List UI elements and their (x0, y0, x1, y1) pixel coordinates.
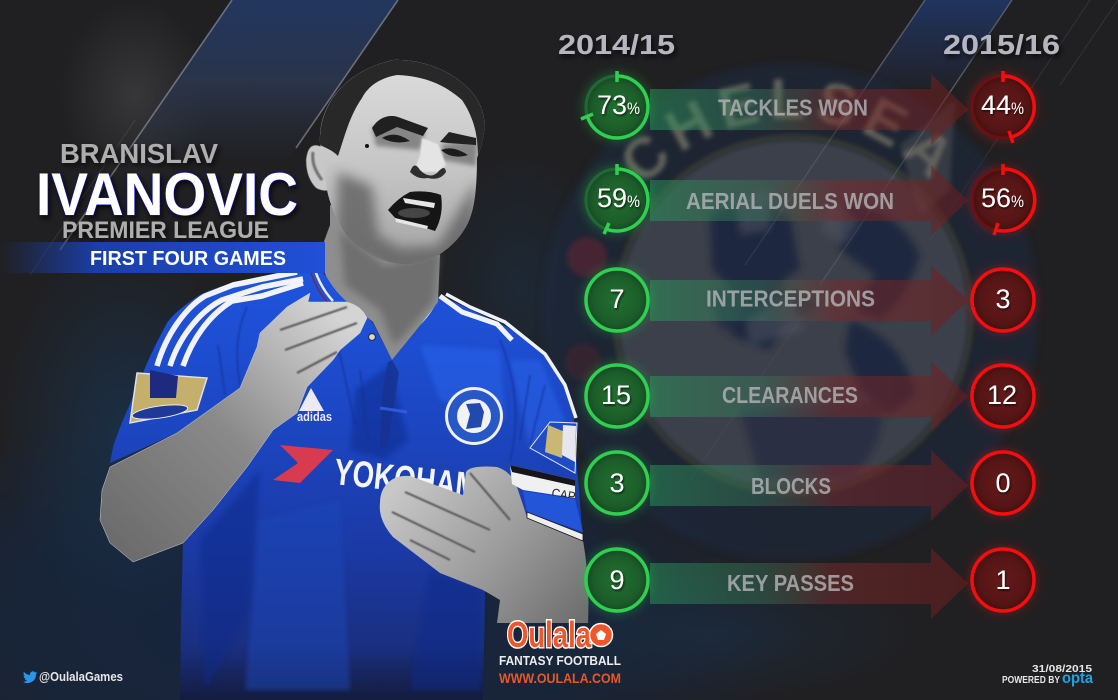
shirt shading (200, 345, 565, 690)
date and credit (1002, 663, 1093, 687)
opta logo: opta (1062, 670, 1093, 687)
stubble (336, 172, 478, 276)
circle: 15 (586, 365, 648, 427)
circle: 12 (972, 365, 1034, 427)
twitter handle: @OulalaGames (39, 670, 123, 684)
eye right (441, 148, 468, 157)
label: tackles won: TACKLES WON (718, 94, 868, 120)
label: key passes: KEY PASSES (727, 570, 854, 596)
right shoulder stripes (440, 294, 576, 418)
finger lines (280, 307, 357, 373)
label: blocks: BLOCKS (751, 473, 831, 499)
circle: 15: 15 (601, 380, 631, 410)
player photo cut-out (100, 55, 588, 700)
brow left (372, 116, 428, 137)
captain armband: CAP (550, 485, 577, 504)
arrow: tackles won (650, 74, 968, 145)
club badge (445, 387, 503, 445)
stat labels (686, 94, 894, 596)
title block (0, 138, 325, 273)
collar button (368, 334, 376, 340)
nose bridge highlight (414, 138, 446, 172)
circle: 3: 3 (609, 468, 625, 498)
circle: 3: 3 (995, 284, 1011, 314)
right hand and arm (380, 467, 588, 623)
crest lettering: CHELSEA (622, 76, 948, 180)
bar label: FIRST FOUR GAMES (90, 248, 286, 270)
circle: 9: 9 (609, 565, 625, 595)
surname: IVANOVIC (36, 161, 298, 228)
circle: 56% (972, 164, 1035, 235)
ear (306, 145, 332, 191)
circle: 59% (586, 164, 648, 234)
icon: twitter bird (23, 671, 37, 683)
label: clearances: CLEARANCES (722, 382, 858, 408)
left sleeve patch (130, 370, 207, 423)
2015/16 circles (970, 71, 1036, 613)
first name: BRANISLAV (60, 138, 218, 169)
left shoulder stripes (157, 272, 303, 366)
2015/16: 2015/16 (943, 29, 1060, 60)
tongue (398, 208, 430, 218)
circle: 44%: 44 (981, 90, 1011, 120)
adidas logo (297, 388, 332, 424)
circle: 73% (581, 71, 648, 138)
collar placket (380, 360, 399, 448)
brand url: WWW.OULALA.COM (499, 670, 621, 686)
collar trim (312, 260, 437, 327)
glow (970, 74, 1036, 613)
brow right (440, 132, 476, 145)
circle: 56%: 56 (981, 183, 1011, 213)
circle: 1: 1 (995, 565, 1011, 595)
circle: 12: 12 (987, 380, 1017, 410)
icon: football (590, 624, 612, 646)
circle: 73%: % (627, 99, 640, 118)
season headers (558, 29, 1060, 60)
circle: 44%: % (1011, 99, 1024, 118)
2014/15: 2014/15 (558, 29, 675, 60)
circle: 0: 0 (995, 468, 1011, 498)
arrow: blocks (650, 450, 968, 521)
crest lion (710, 205, 920, 480)
date and credit: POWERED BY (1002, 675, 1060, 686)
captain armband (510, 465, 583, 541)
blue bar (0, 242, 325, 273)
arrow: interceptions (650, 265, 968, 336)
league: PREMIER LEAGUE (62, 217, 269, 244)
right finger lines (392, 473, 510, 560)
teeth (395, 198, 435, 229)
glow (584, 74, 650, 613)
shirt folds (218, 307, 545, 462)
circle: 1 (972, 549, 1034, 611)
red chevron logo (273, 445, 333, 483)
circle: 3 (972, 269, 1034, 331)
eye sockets (372, 124, 478, 166)
hair (320, 60, 485, 158)
left forearm and hand (100, 293, 367, 562)
head (320, 60, 484, 264)
mouth (388, 191, 442, 231)
circle: 44% (972, 71, 1034, 143)
mole (365, 144, 369, 148)
eye left (382, 135, 410, 142)
right sleeve patch (530, 422, 577, 473)
brand logo: Oulala: Oulala (507, 614, 592, 655)
circle: 7: 7 (609, 284, 625, 314)
ghosted club crest (545, 64, 1038, 560)
circle: 59%: % (627, 192, 640, 211)
circle: 59%: 59 (597, 183, 627, 213)
circle: 9 (586, 549, 648, 611)
label: aerial duels won: AERIAL DUELS WON (686, 188, 894, 214)
arrow: key passes (650, 548, 968, 619)
circle: 56%: % (1011, 192, 1024, 211)
2014/15 circles (581, 71, 650, 613)
arrow: clearances (650, 361, 968, 432)
sponsor text: YOKOHAMA (332, 451, 501, 509)
date and credit: 31/08/2015 (1032, 663, 1092, 675)
adidas logo: adidas (297, 409, 332, 424)
label: interceptions: INTERCEPTIONS (706, 286, 875, 312)
neck (318, 205, 440, 360)
circle: 7 (586, 269, 648, 331)
circle: 3 (586, 452, 648, 514)
neck shadow (340, 230, 440, 345)
arrow: aerial duels won (650, 165, 968, 236)
nose shadow (410, 165, 446, 179)
brand strapline: FANTASY FOOTBALL (499, 653, 621, 668)
circle: 0 (972, 452, 1034, 514)
circle: 73%: 73 (597, 90, 627, 120)
shirt body (110, 260, 583, 700)
